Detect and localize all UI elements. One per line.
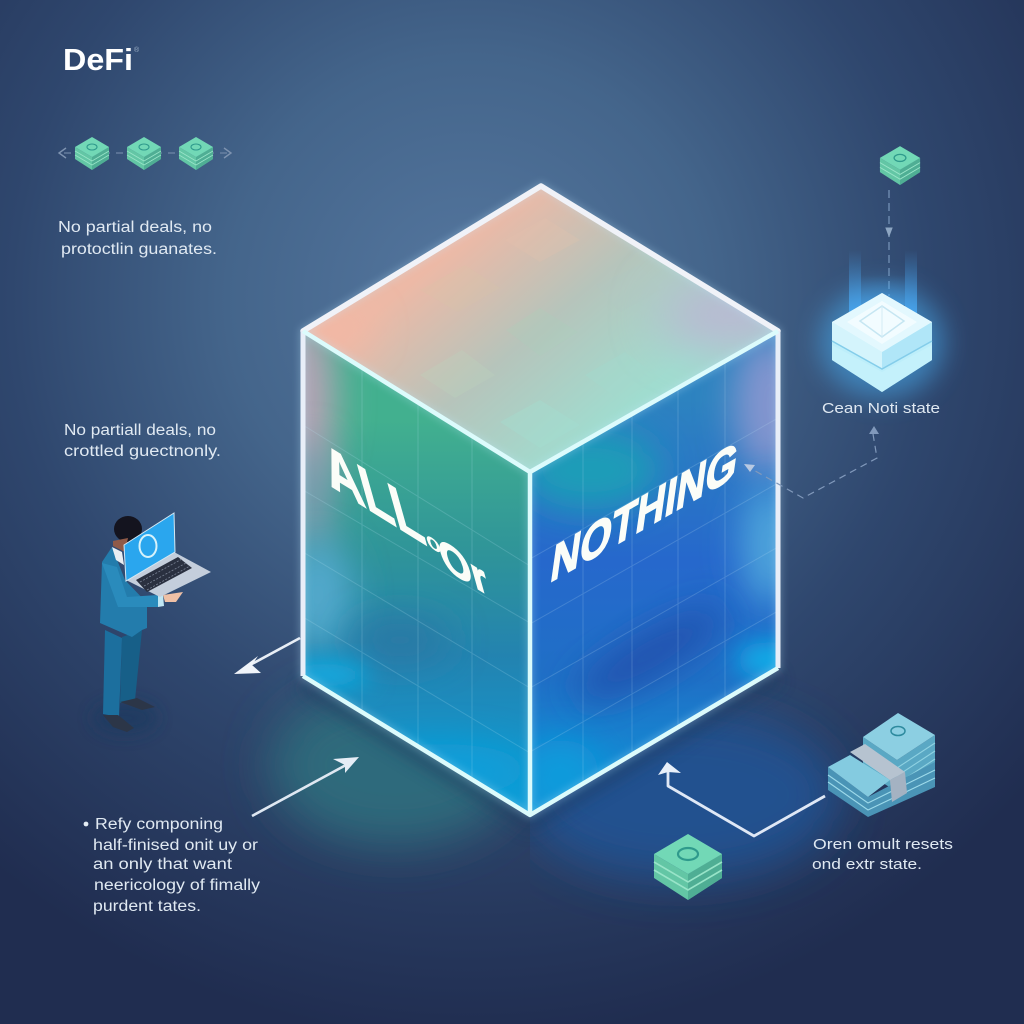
text block: top left: protoctlin guanates. — [61, 241, 217, 258]
laptop: screen — [124, 513, 175, 581]
icon: blue cash bundle — [828, 713, 935, 817]
person: arm — [102, 563, 158, 607]
person with laptop — [93, 513, 211, 734]
cube label: ALL or: Or — [432, 527, 494, 607]
laptop: screen logo — [140, 535, 156, 557]
laptop: base — [126, 552, 211, 597]
title: DeFi: DeFi — [63, 42, 133, 77]
cube label: ALL or: ALL — [314, 427, 432, 561]
cube label: ALL or: o — [422, 524, 444, 560]
floor glow: blue — [520, 710, 840, 880]
icon: green cash stack — [654, 834, 722, 900]
arrow: from cash bundle back to cube — [658, 762, 825, 836]
text block: bottom right: ond extr state. — [812, 856, 922, 873]
arrow: dashed to NOTHING — [744, 426, 879, 498]
icon row: three cash stacks on a dashed line — [59, 137, 231, 170]
floor glow: teal — [270, 685, 520, 845]
text block: middle left: crottled guectnonly. — [64, 443, 221, 460]
text block: top left — [58, 219, 217, 258]
person: shoes — [103, 698, 155, 732]
person: legs — [103, 630, 142, 717]
title: DeFi: ® — [134, 46, 140, 54]
person: shirt collar — [112, 547, 124, 565]
cube: left face — [306, 335, 528, 811]
label: clean state: Cean Noti state — [822, 400, 940, 417]
text block: bullet list: neericology of fimally — [94, 877, 260, 894]
text block: bullet list: Refy componing — [95, 816, 223, 833]
text block: top left: No partial deals, no — [58, 219, 212, 236]
arrow: out to person — [234, 638, 300, 674]
icon: cash stack top right — [880, 146, 920, 185]
cube: top face — [308, 189, 773, 470]
cube label: NOTHING: NOTHING — [547, 430, 742, 595]
text block: bottom right — [812, 836, 953, 873]
arrow: into cube — [252, 757, 359, 816]
person: head — [113, 516, 142, 552]
person: cuff and hand — [158, 592, 183, 607]
laptop: keyboard — [136, 557, 192, 592]
text block: bottom right: Oren omult resets — [813, 836, 953, 853]
person: jacket — [100, 547, 147, 637]
central cube — [275, 185, 806, 820]
cube: glowing edges — [303, 186, 778, 815]
cube: right face — [532, 335, 776, 811]
cube shadow — [303, 676, 778, 823]
person: shadow — [93, 702, 157, 734]
text block: bullet list: half-finised onit uy or — [93, 837, 258, 854]
text block: bullet list: an only that want — [93, 856, 233, 873]
text block: middle left — [64, 422, 221, 460]
icon: glowing block — [820, 250, 944, 398]
text block: middle left: No partiall deals, no — [64, 422, 216, 439]
text block: bullet list — [84, 816, 260, 915]
arrow: dashed down to glowing block — [886, 190, 892, 296]
text block: bullet list: purdent tates. — [93, 898, 201, 915]
